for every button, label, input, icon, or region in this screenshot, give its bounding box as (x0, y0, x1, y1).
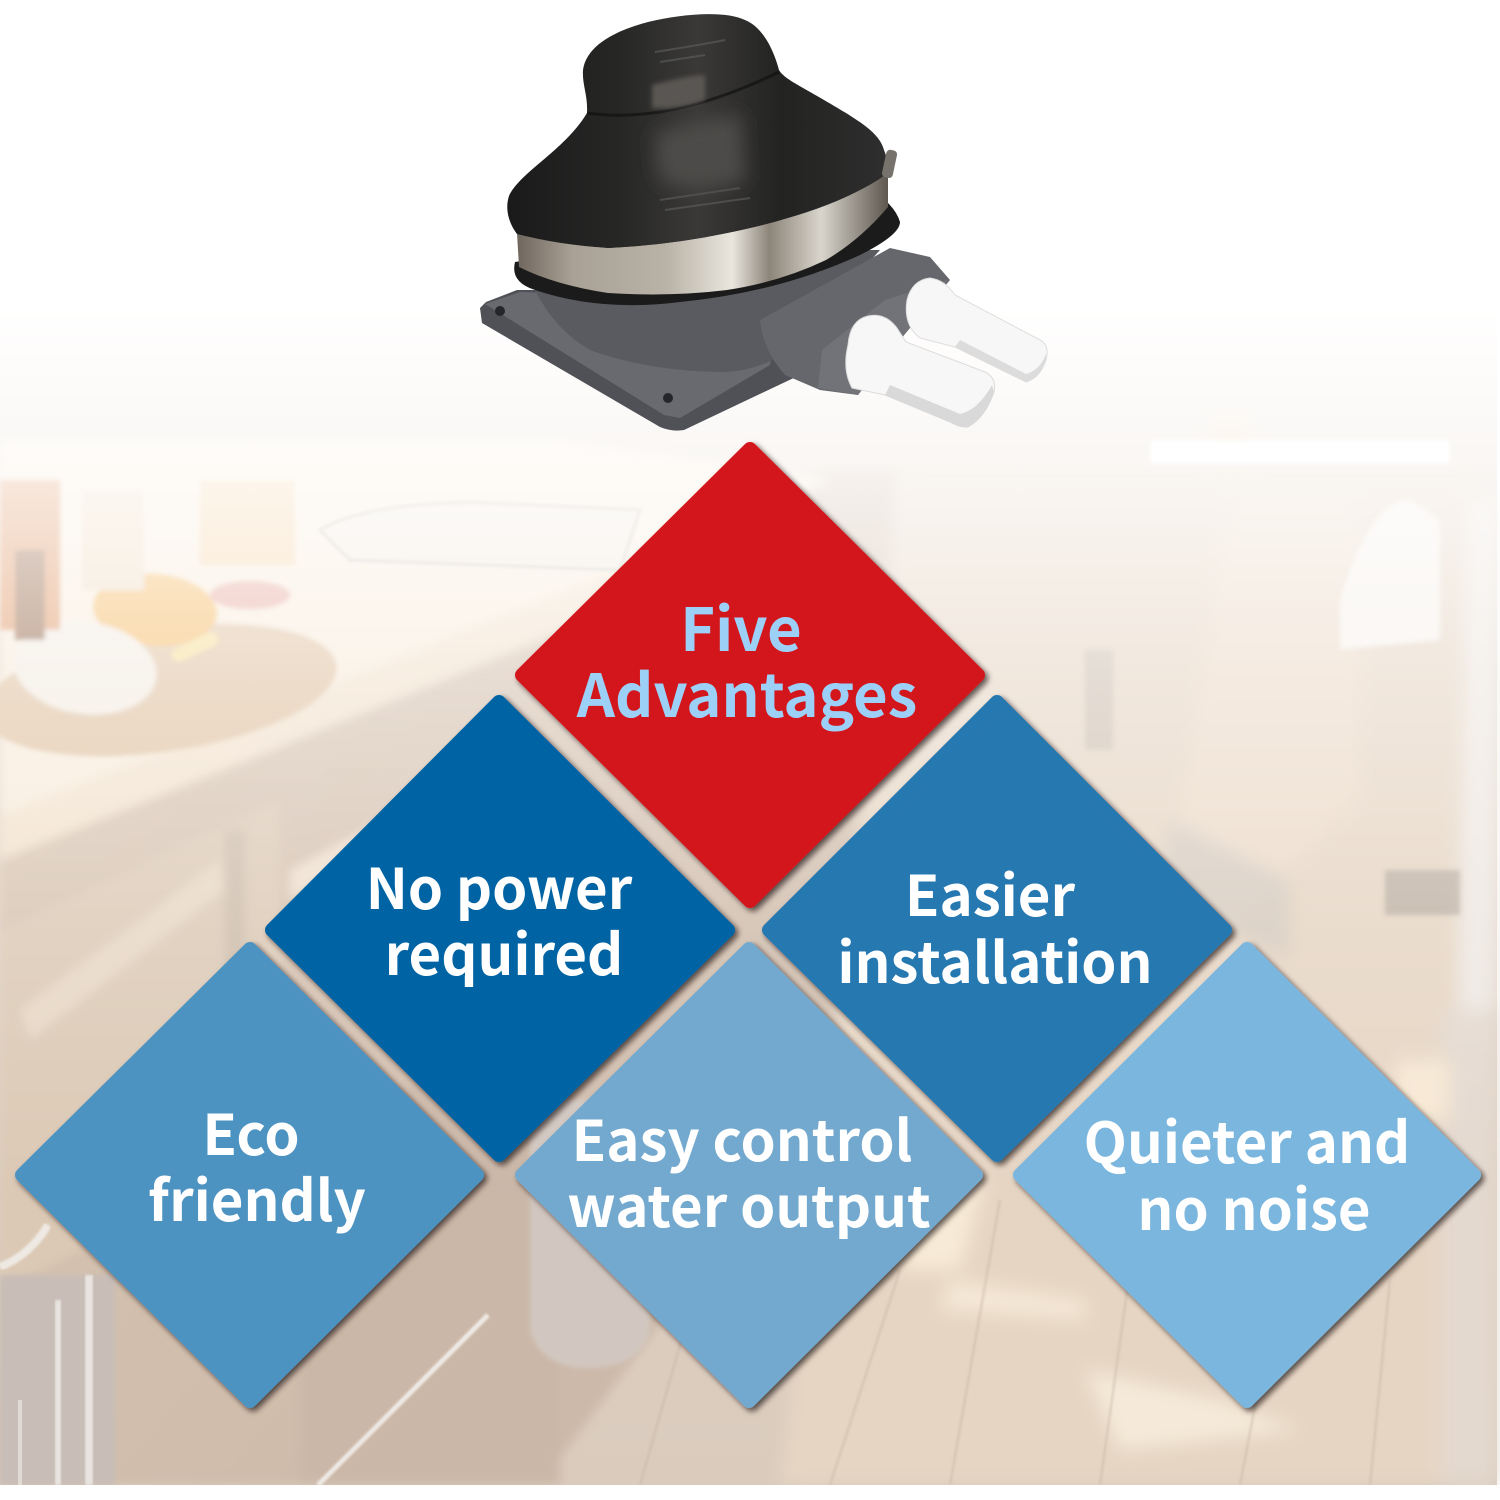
heading: Five Advantages: Five (680, 583, 802, 669)
pump: grey mounting plate (480, 290, 800, 431)
product photo: foot pump (480, 14, 1047, 431)
background: floor planks (640, 1170, 1390, 1485)
label: Quieter and no noise (1084, 1099, 1410, 1247)
background: lower cabinet door, bin and handles (0, 1100, 650, 1485)
diamond: Easy control water output (522, 949, 976, 1401)
diamond: Easier installation (769, 702, 1225, 1155)
label: Eco friendly (148, 1091, 366, 1238)
label: Easy control water output: Easy control (572, 1097, 912, 1178)
bottom white strip (0, 1485, 1500, 1500)
pump: clamp screw (881, 149, 898, 179)
pump: black rubber cap (507, 14, 888, 248)
label: Eco friendly: Eco (202, 1091, 300, 1172)
pump: stainless steel band (517, 172, 888, 294)
background: sink (320, 502, 640, 570)
label: Easy control water output: water output (567, 1163, 931, 1244)
label: Easier installation (837, 852, 1153, 1000)
label: Easier installation: installation (837, 919, 1153, 1000)
heading: Five Advantages (576, 583, 917, 735)
pump: white hose barb, rear (906, 278, 1047, 382)
background: right side living area and floor (780, 425, 1497, 1485)
pump: white hose barb, front (846, 315, 995, 427)
diamond: Quieter and no noise (1020, 949, 1474, 1401)
label: No power required (366, 845, 633, 992)
background: kitchen counter and cabinets (0, 440, 900, 1485)
pump: black gasket ring (514, 203, 900, 305)
label: Easy control water output (567, 1097, 931, 1244)
label: No power required: required (385, 911, 623, 992)
label: Easier installation: Easier (905, 852, 1076, 933)
background: cutting board and food (0, 480, 345, 776)
pump: outlet block (760, 248, 950, 395)
background: lit floor patches (900, 1060, 1450, 1450)
label: No power required: No power (366, 845, 633, 926)
label: Quieter and no noise: no noise (1137, 1166, 1371, 1247)
pump: grey bowl under the ring (535, 250, 880, 372)
diamond: Eco friendly (22, 949, 477, 1401)
label: Eco friendly: friendly (148, 1157, 366, 1238)
heading: Five Advantages: Advantages (576, 649, 917, 735)
label: Quieter and no noise: Quieter and (1084, 1099, 1410, 1180)
diamond: No power required (272, 702, 728, 1155)
diamond: Five Advantages (red) (522, 449, 978, 901)
background: shelf, chair and vents (1085, 440, 1460, 915)
